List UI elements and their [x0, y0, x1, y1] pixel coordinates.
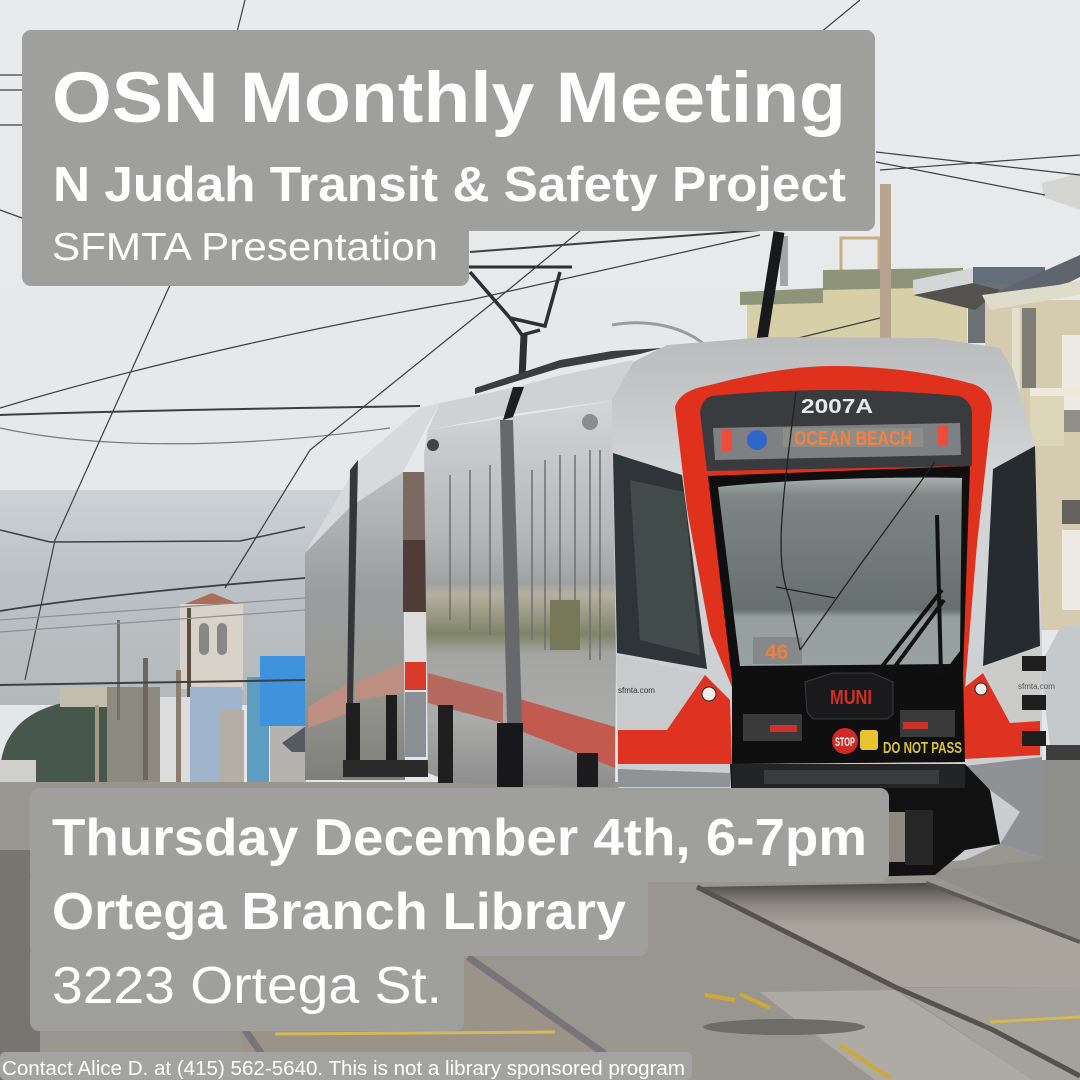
muni logo plate — [805, 673, 893, 719]
sfmta lettering left: sfmta.com — [618, 686, 655, 695]
sfmta lettering right: sfmta.com — [1018, 682, 1055, 691]
windshield — [718, 477, 962, 666]
marker lights — [743, 710, 955, 741]
distant town — [0, 593, 306, 785]
car number: 2007A — [801, 396, 873, 418]
destination text: OCEAN BEACH — [794, 428, 912, 450]
wiper and wires on glass — [873, 515, 944, 680]
panel: title background — [22, 30, 875, 286]
route number — [753, 637, 802, 664]
houses on the right — [740, 173, 1080, 630]
panel: contact footer background — [0, 1052, 692, 1080]
black cab face — [708, 466, 970, 764]
subtitle: N Judah Transit & Safety Project — [53, 158, 846, 212]
train: middle car side — [424, 348, 662, 787]
ocean — [0, 490, 360, 705]
date and time: Thursday December 4th, 6-7pm — [52, 809, 867, 867]
stop sign — [832, 728, 858, 754]
road — [0, 760, 1080, 1080]
pantograph — [468, 232, 779, 378]
train: front body: MUNI — [830, 687, 872, 709]
venue: Ortega Branch Library — [52, 883, 626, 941]
red frame — [675, 366, 992, 764]
overhead wires — [0, 0, 1080, 685]
contact note: Contact Alice D. at (415) 562-5640. This is not a library sponsored program — [2, 1058, 685, 1080]
do not pass: DO NOT PASS — [883, 740, 962, 757]
destination panel — [700, 390, 972, 471]
route number: 46 — [765, 641, 788, 664]
right cab window — [983, 446, 1040, 666]
panel: event details background — [30, 788, 889, 1031]
train: front body — [612, 337, 1055, 880]
bumper grille — [732, 764, 965, 788]
title: OSN Monthly Meeting — [52, 59, 846, 138]
train: front body: STOP — [835, 735, 855, 749]
train: rear car — [305, 403, 440, 780]
coupler — [889, 810, 933, 865]
left cab window — [613, 453, 707, 669]
car at right — [1040, 624, 1080, 745]
underframe — [730, 764, 1000, 880]
presenter line: SFMTA Presentation — [52, 226, 438, 269]
cab badges — [702, 683, 987, 701]
tram icon — [860, 730, 878, 750]
address: 3223 Ortega St. — [52, 957, 442, 1015]
